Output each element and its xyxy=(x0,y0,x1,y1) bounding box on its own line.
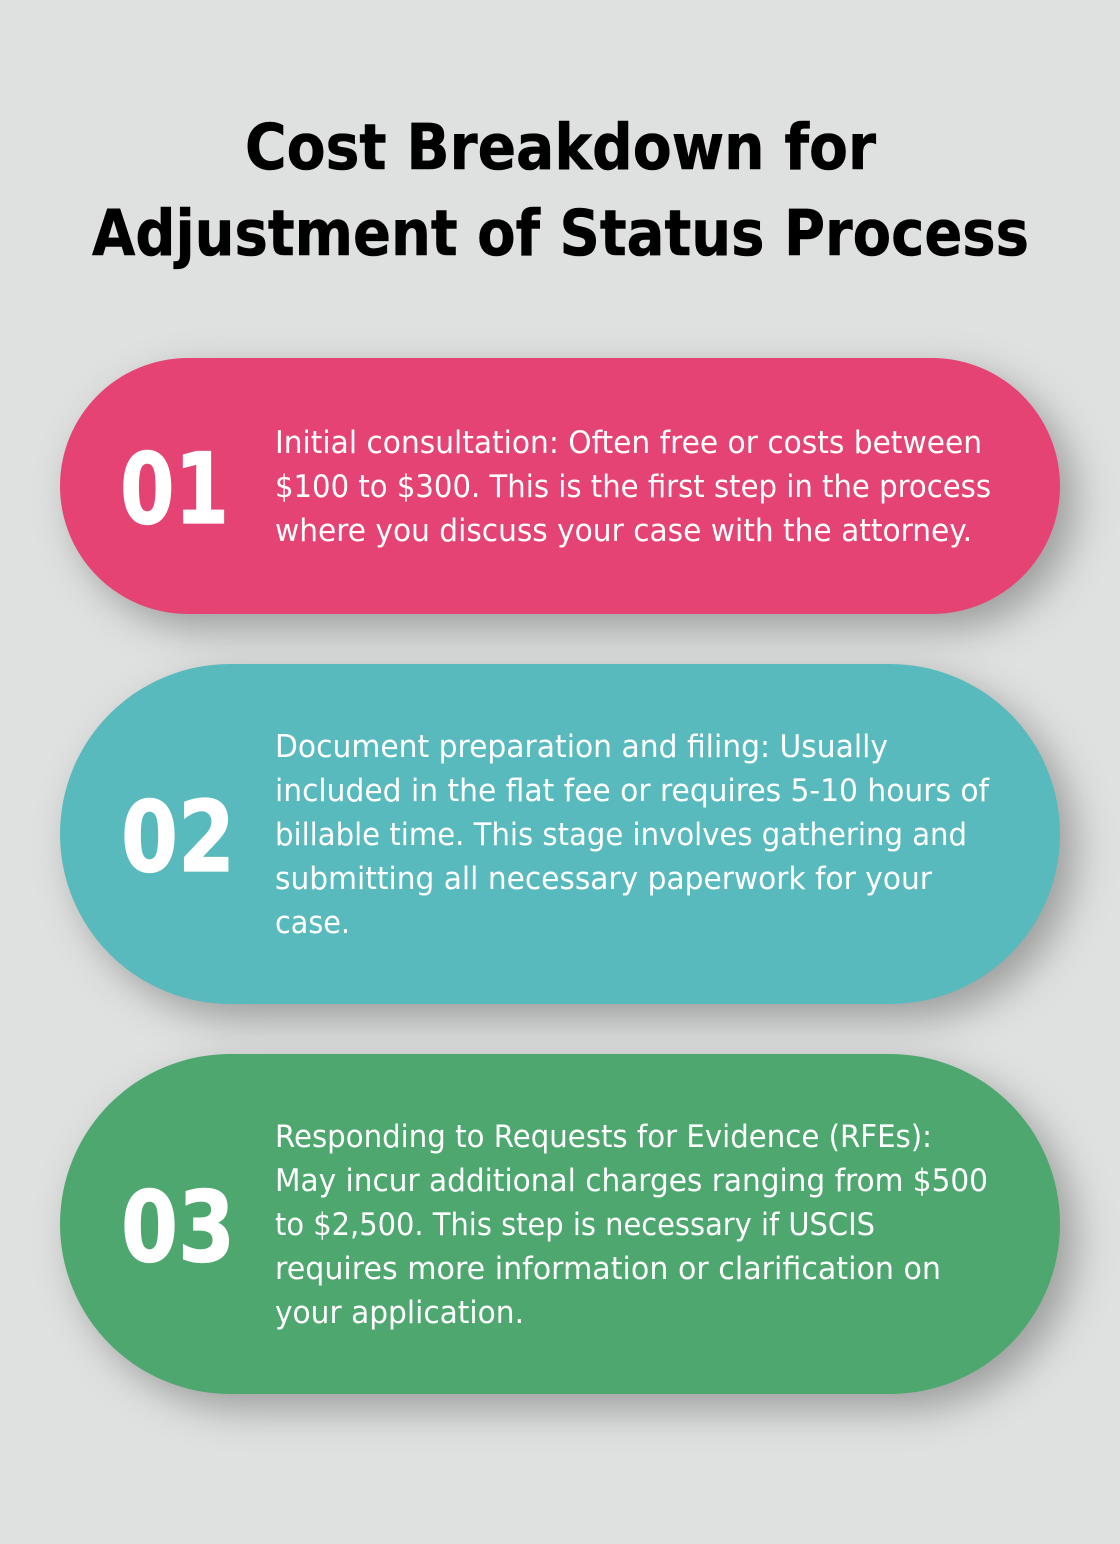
text: step 2 description: case. xyxy=(275,905,350,941)
shadow: step 1 xyxy=(75,373,1075,629)
text: step 2 description: included in the flat fee or requires 5-10 hours of xyxy=(275,773,990,809)
title: Adjustment of Status Process xyxy=(92,197,1029,270)
pill: step 1 xyxy=(60,358,1060,614)
number: 03: 03 xyxy=(121,1171,235,1285)
text: step 2 description: submitting all necessary paperwork for your xyxy=(275,861,932,897)
title: Cost Breakdown for xyxy=(245,111,876,184)
text: step 3 description: requires more information or clarification on xyxy=(275,1251,941,1287)
text: step 1 description xyxy=(275,425,991,549)
text: step 3 description: May incur additional charges ranging from $500 xyxy=(275,1163,988,1199)
panel: step 2 document preparation xyxy=(60,664,1075,1019)
number: 01: 01 xyxy=(120,433,229,547)
text: step 2 description xyxy=(275,729,990,941)
panel: step 3 responding to RFEs xyxy=(60,1054,1075,1409)
text: step 3 description: your application. xyxy=(275,1295,524,1331)
number: 02: 02 xyxy=(121,781,235,895)
text: step 1 description: where you discuss your case with the attorney. xyxy=(275,513,972,549)
text: step 3 description: to $2,500. This step is necessary if USCIS xyxy=(275,1207,875,1243)
title xyxy=(92,111,1029,270)
pill: step 3 xyxy=(60,1054,1060,1394)
text: step 3 description xyxy=(275,1119,988,1331)
shadow: step 2 xyxy=(75,679,1075,1019)
pill: step 2 xyxy=(60,664,1060,1004)
text: step 2 description: billable time. This stage involves gathering and xyxy=(275,817,967,853)
text: step 1 description: $100 to $300. This is the first step in the process xyxy=(275,469,991,505)
text: step 3 description: Responding to Requests for Evidence (RFEs): xyxy=(275,1119,932,1155)
text: step 2 description: Document preparation and filing: Usually xyxy=(275,729,888,765)
text: step 1 description: Initial consultation: Often free or costs between xyxy=(275,425,982,461)
panel: step 1 initial consultation xyxy=(60,358,1075,629)
shadow: step 3 xyxy=(75,1069,1075,1409)
